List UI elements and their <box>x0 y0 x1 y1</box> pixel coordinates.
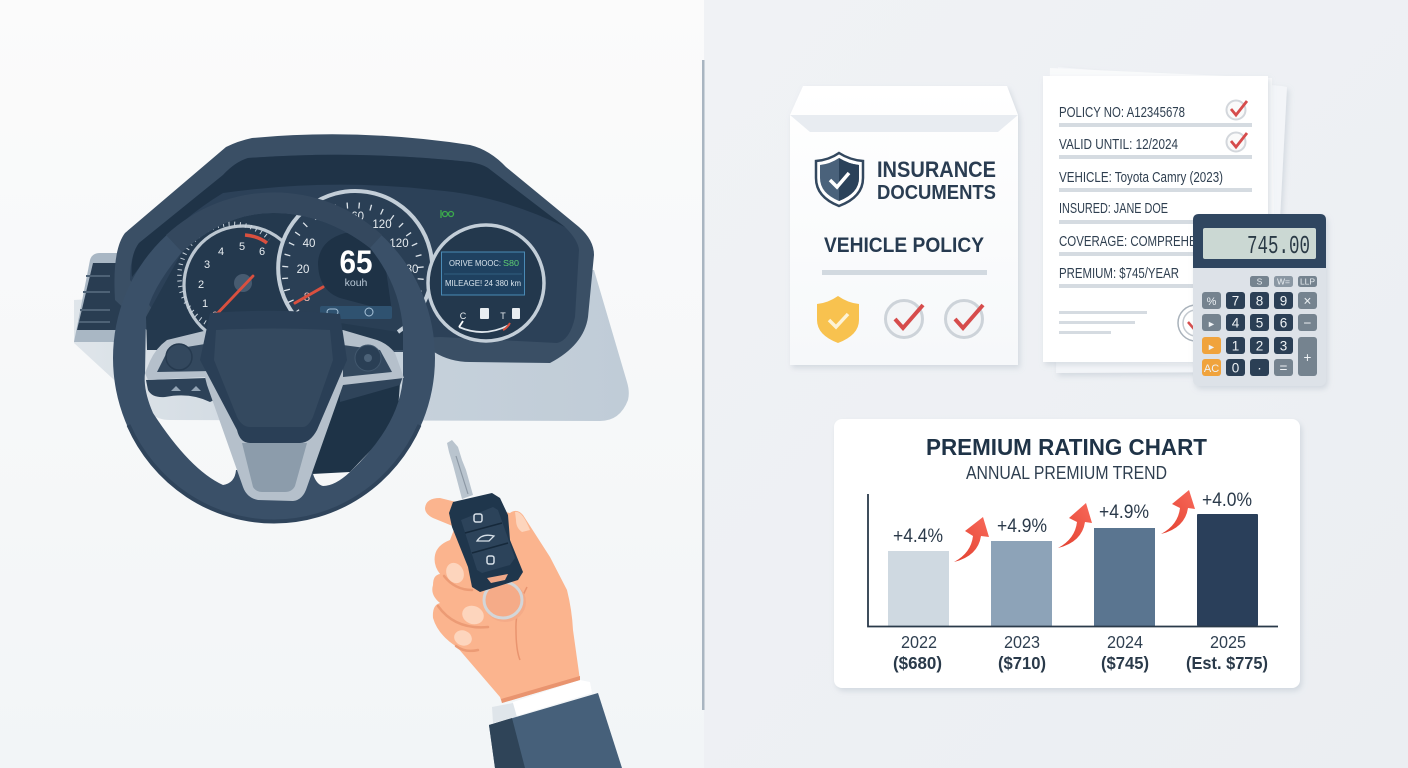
growth labels: +4.9% <box>997 516 1047 537</box>
wrist shadow <box>501 676 580 703</box>
premium values <box>893 653 1268 673</box>
keypad: 8 <box>1256 294 1263 308</box>
back sheets <box>1056 67 1287 373</box>
premium values: ($710) <box>998 653 1046 673</box>
speedometer gauge: 60 <box>351 211 364 223</box>
indicator strip <box>320 306 392 319</box>
tachometer gauge: 1 <box>202 298 208 310</box>
keypad: = <box>1280 360 1288 376</box>
keypad <box>1202 292 1317 376</box>
front sheet <box>1043 76 1268 362</box>
speedometer gauge: kouh <box>345 277 368 289</box>
bar chart <box>868 494 1278 626</box>
fuel gauge: T <box>500 311 506 321</box>
tachometer gauge: 6 <box>259 246 265 258</box>
key fob <box>449 493 523 592</box>
thumb nail <box>515 512 530 532</box>
steering wheel <box>113 192 435 523</box>
hood shadow band <box>132 155 565 277</box>
calculator <box>1193 214 1326 386</box>
dashboard lower trim <box>74 270 629 421</box>
year labels: 2022 <box>901 632 937 652</box>
key ring <box>484 582 522 618</box>
keypad: 6 <box>1280 316 1287 330</box>
rim top segment <box>166 192 382 252</box>
eco indicator light <box>441 210 454 218</box>
instrument hood <box>114 134 594 363</box>
calculator display: 745.00 <box>1247 231 1310 261</box>
tachometer gauge: 2 <box>198 279 204 291</box>
icon: row check one <box>1226 100 1247 120</box>
airbag hub <box>200 311 347 443</box>
keypad: AC <box>1204 363 1219 375</box>
button pods <box>157 344 212 372</box>
hand silhouette <box>425 498 580 703</box>
drive mode display: MILEAGE! 24 380 km <box>445 278 521 288</box>
dashboard illustration <box>74 134 629 523</box>
hand holding car key <box>425 440 622 768</box>
policy rows <box>1059 105 1231 282</box>
growth labels: +4.0% <box>1202 490 1252 511</box>
arrow: 2023 to 2024 <box>1058 503 1092 548</box>
icon: check badge one <box>886 300 923 338</box>
speedometer gauge: 120 <box>372 219 392 231</box>
envelope heading <box>877 157 996 204</box>
premium values: (Est. $775) <box>1186 653 1268 673</box>
fuel gauge: C <box>460 311 467 321</box>
speedometer gauge: 80 <box>406 264 418 276</box>
arrow: 2024 to 2025 <box>1161 490 1195 534</box>
icon: seal stamp <box>1178 305 1214 341</box>
tachometer gauge: 5 <box>239 241 245 253</box>
steering column <box>312 383 400 474</box>
gauge recess <box>146 213 403 350</box>
keypad: · <box>1257 360 1262 376</box>
growth labels: +4.4% <box>893 526 943 547</box>
lower spoke insert <box>242 443 307 492</box>
year labels <box>901 632 1246 652</box>
chart subtitle: ANNUAL PREMIUM TREND <box>966 463 1167 483</box>
speedometer gauge: 20 <box>297 264 309 276</box>
insurance envelope <box>790 86 1018 365</box>
speedometer gauge: 120 <box>389 238 409 250</box>
drive mode display <box>442 252 524 295</box>
palm crease <box>516 587 527 660</box>
tachometer gauge: 0 <box>212 310 218 322</box>
drive mode display: ORIVE MOOC: <box>449 258 501 268</box>
steering controls <box>146 378 214 402</box>
speedometer gauge: 40 <box>303 238 315 250</box>
left background panel <box>0 0 704 768</box>
keypad: 7 <box>1232 294 1239 308</box>
keypad: ► <box>1207 319 1216 329</box>
policy rows: COVERAGE: COMPREHENSIVE <box>1059 234 1231 250</box>
policy rows: VEHICLE: Toyota Camry (2023) <box>1059 170 1223 186</box>
envelope heading: INSURANCE <box>877 157 996 182</box>
drive mode display: S80 <box>503 258 519 268</box>
keypad: 5 <box>1256 316 1263 330</box>
premium rating chart card <box>834 419 1300 688</box>
growth labels <box>893 490 1252 547</box>
key blade <box>447 440 473 499</box>
growth labels: +4.9% <box>1099 502 1149 523</box>
speedometer gauge <box>278 191 432 332</box>
keypad: 2 <box>1256 338 1263 354</box>
vehicle policy label: VEHICLE POLICY <box>824 234 984 257</box>
air vent <box>74 253 125 342</box>
policy document stack <box>1043 67 1287 373</box>
right background panel <box>704 0 1408 768</box>
keypad: % <box>1207 296 1217 308</box>
function keys: W= <box>1277 276 1290 286</box>
instrument cluster face <box>130 155 579 345</box>
wheel rim <box>113 193 435 523</box>
tachometer gauge <box>179 224 302 344</box>
shirt cuff <box>513 680 592 717</box>
keypad: 3 <box>1280 338 1287 354</box>
year labels: 2025 <box>1210 632 1246 652</box>
calculator body <box>1193 214 1326 386</box>
icon: yellow shield <box>817 296 859 343</box>
keypad: − <box>1304 316 1312 330</box>
function keys: LLP <box>1300 276 1315 286</box>
jacket sleeve <box>489 693 622 768</box>
arrow: 2022 to 2023 <box>954 517 989 562</box>
icon: check badge two <box>946 300 983 338</box>
envelope heading: DOCUMENTS <box>877 182 996 204</box>
policy rows: INSURED: JANE DOE <box>1059 201 1168 217</box>
envelope body <box>790 86 1018 365</box>
year labels: 2023 <box>1004 632 1040 652</box>
finger nails <box>443 560 486 648</box>
keypad: 9 <box>1280 294 1287 308</box>
keypad: × <box>1304 294 1311 308</box>
speedometer gauge: 8 <box>304 292 310 304</box>
keypad: + <box>1304 350 1312 365</box>
policy rows: VALID UNTIL: 12/2024 <box>1059 137 1178 153</box>
policy rows: POLICY NO: A12345678 <box>1059 105 1185 121</box>
icon: row check two <box>1226 132 1247 152</box>
keypad: 0 <box>1232 360 1239 376</box>
keypad: 4 <box>1232 316 1240 330</box>
function keys: S <box>1257 276 1263 286</box>
calculator display <box>1203 228 1316 261</box>
keypad: 1 <box>1232 338 1239 354</box>
speed readout: 65 <box>340 244 372 280</box>
envelope flap fold <box>790 115 1018 132</box>
chart title: PREMIUM RATING CHART <box>926 434 1207 460</box>
icon: insurance shield <box>816 153 863 206</box>
premium values: ($680) <box>893 653 942 673</box>
wheel spokes <box>145 330 404 501</box>
fuel gauge <box>459 308 520 332</box>
finger creases <box>438 576 488 651</box>
policy rows: PREMIUM: $745/YEAR <box>1059 266 1179 282</box>
tachometer gauge: 3 <box>204 259 210 271</box>
tachometer gauge: 4 <box>218 246 224 258</box>
function keys <box>1250 276 1317 287</box>
year labels: 2024 <box>1107 632 1143 652</box>
keypad: ► <box>1207 342 1216 352</box>
info display gauge <box>428 225 544 341</box>
premium values: ($745) <box>1101 653 1149 673</box>
